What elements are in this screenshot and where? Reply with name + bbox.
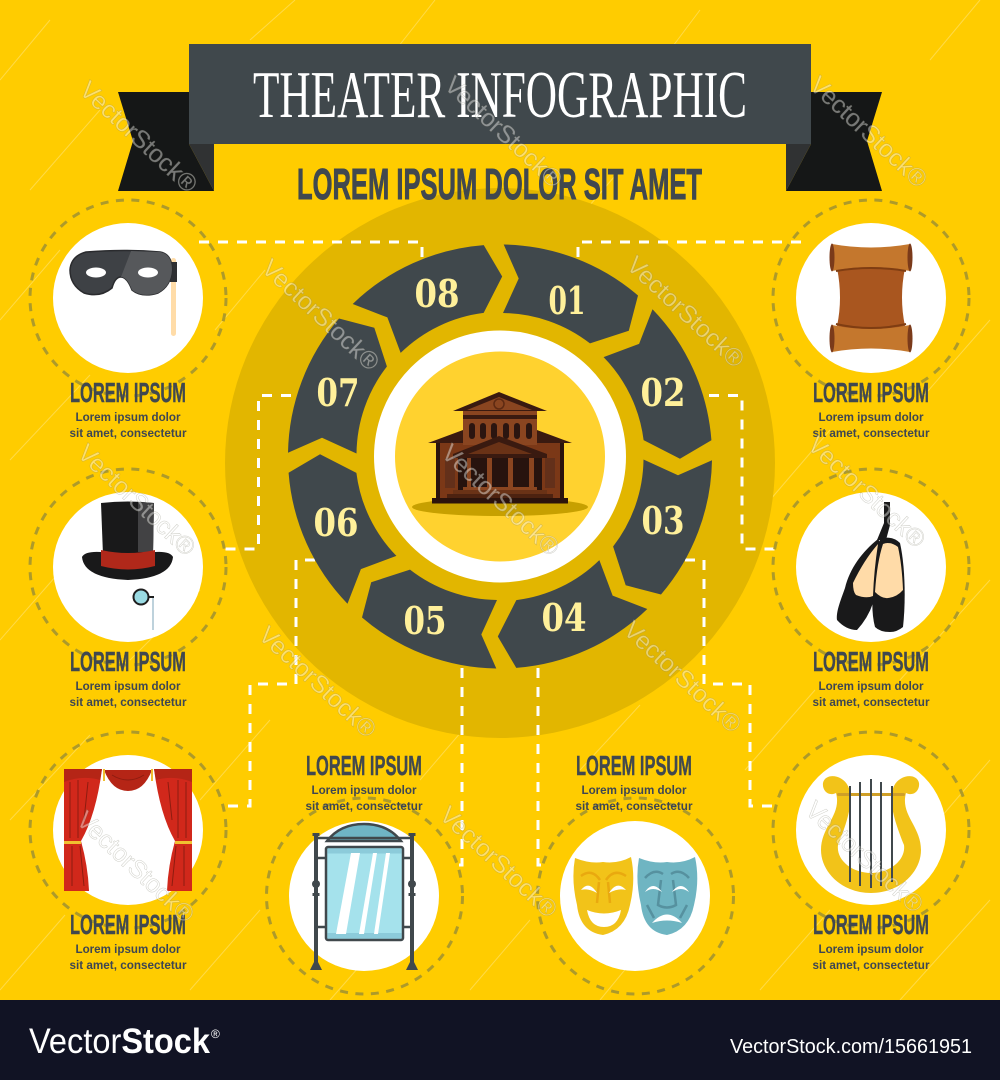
item: comedy and tragedy masks [538,750,734,994]
item: top hat [30,469,226,709]
big background circle [225,188,775,738]
segment 02 [582,309,747,474]
footer registered mark: ® [211,1027,220,1041]
caption [70,377,187,440]
segment numbers: 03 [642,498,684,543]
caption [70,909,187,972]
watermarks: VectorStock® [802,431,931,554]
caption: sit amet, consectetur [70,695,187,709]
caption [812,909,930,972]
icon: stage curtain [64,769,192,891]
caption: Lorem ipsum dolor [818,410,924,424]
icon: theater building [412,392,588,516]
segment numbers: 08 [414,271,460,316]
caption [576,750,693,813]
segment 04 [482,539,648,704]
dashed connectors [199,242,801,865]
title banner [189,44,811,144]
caption: sit amet, consectetur [70,958,187,972]
footer logo: VectorStock [29,1022,210,1061]
watermarks: VectorStock® [804,71,933,194]
caption: LOREM IPSUM [70,909,186,940]
item: mask [30,200,226,440]
segment 05 [362,570,497,668]
item: scroll [773,200,969,440]
segment 07 [288,318,387,454]
footer bar [0,1000,1000,1080]
title banner: THEATER INFOGRAPHIC [253,58,747,132]
segment 03 [613,460,712,594]
watermarks: VectorStock® [256,254,385,377]
caption: Lorem ipsum dolor [582,783,687,797]
watermarks: VectorStock® [618,616,747,739]
item: mirror [266,750,462,994]
segment numbers: 04 [542,595,586,640]
item: curtain [30,732,226,972]
caption: sit amet, consectetur [812,426,930,440]
centre ring [384,341,616,572]
caption: Lorem ipsum dolor [76,679,181,693]
watermarks: VectorStock® [71,806,200,929]
segment numbers: 01 [548,278,586,323]
segment numbers: 06 [314,500,358,545]
segment numbers: 02 [640,370,686,415]
caption: Lorem ipsum dolor [818,942,924,956]
caption: sit amet, consectetur [306,799,423,813]
caption: sit amet, consectetur [70,426,187,440]
segment 06 [253,439,418,604]
caption: LOREM IPSUM [576,750,692,781]
icon: masquerade mask [70,250,177,336]
caption: sit amet, consectetur [812,958,930,972]
ribbon tails [118,92,882,191]
subtitle: LOREM IPSUM DOLOR SIT AMET [297,160,702,209]
watermarks: VectorStock® [74,76,203,199]
segment 08 [352,209,518,374]
watermarks [71,71,933,929]
caption: Lorem ipsum dolor [76,410,181,424]
watermarks: VectorStock® [72,439,201,562]
item: lyre [773,732,969,972]
caption: Lorem ipsum dolor [76,942,181,956]
icon: parchment scroll [830,244,912,352]
caption [306,750,423,813]
watermarks: VectorStock® [800,796,929,919]
caption: LOREM IPSUM [70,646,186,677]
segmented ring [253,209,747,704]
segment 01 [503,244,638,343]
caption: Lorem ipsum dolor [818,679,924,693]
watermarks: VectorStock® [434,801,563,924]
caption: sit amet, consectetur [812,695,930,709]
watermarks: VectorStock® [436,439,565,562]
icon: top hat and monocle [82,502,173,630]
item: ballet shoes [773,469,969,709]
footer url: VectorStock.com/15661951 [730,1036,972,1058]
segment numbers [314,271,686,643]
caption: sit amet, consectetur [576,799,693,813]
watermarks: VectorStock® [439,71,568,194]
caption: Lorem ipsum dolor [312,783,417,797]
segment numbers: 07 [316,370,360,415]
caption [70,646,187,709]
caption: LOREM IPSUM [306,750,422,781]
icon: ballet shoes [837,502,905,632]
segment numbers: 05 [404,598,446,643]
caption: LOREM IPSUM [70,377,186,408]
caption [812,377,930,440]
icon: theatre masks [573,857,697,935]
watermarks: VectorStock® [253,621,382,744]
watermarks: VectorStock® [621,251,750,374]
icon: lyre [821,776,921,893]
icon: standing mirror [310,824,418,970]
caption [812,646,930,709]
